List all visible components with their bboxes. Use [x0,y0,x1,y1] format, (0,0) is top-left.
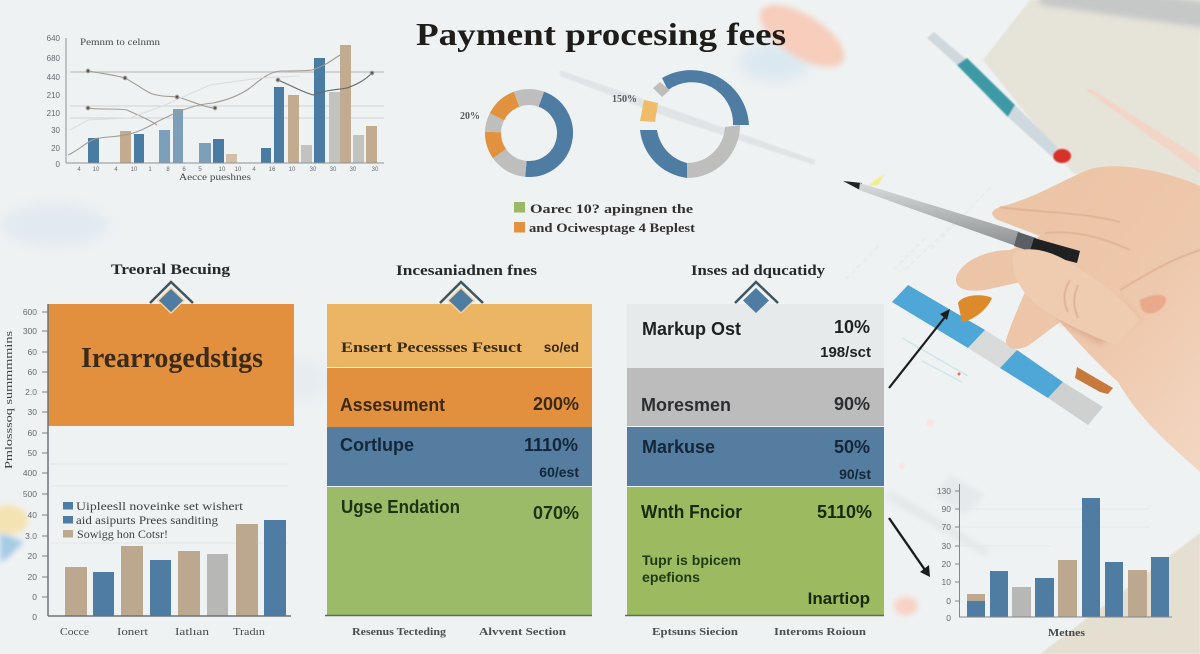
bottom right axis labels: 30 [942,541,951,551]
thumb [1013,249,1140,345]
bottom right bars [967,498,1169,617]
donut label left: 20% [460,111,480,122]
left y axis title: Pmlosssoq summmmins [4,331,15,469]
chart axis labels: 4 [252,167,256,173]
left axis ticks and labels: 30 [28,407,37,417]
title: Payment procesing fees [416,16,786,52]
chart caption: Pemnm to celnmn [80,38,160,48]
middle column heading: Incesaniadnen fnes [396,263,537,279]
left axis ticks and labels: 50 [28,448,37,458]
chart axis labels: 10 [131,167,138,173]
chart axis labels: 640 [47,34,61,43]
left bars [65,520,286,616]
chart axis labels: 30 [330,167,337,173]
right block labels: Moresmen [641,395,731,415]
right block labels: epefions [642,570,700,585]
right block labels: 5110% [817,502,872,522]
middle block labels: Cortlupe [340,435,414,455]
left axis ticks and labels: 300 [23,326,37,336]
arrow to bar chart [889,518,930,577]
bottom right axis labels: 0 [946,596,951,606]
right block labels: 10% [834,317,870,337]
bottom right axis labels: 20 [942,559,951,569]
left x axis labels: Ionert [117,627,148,638]
right block labels: Markup Ost [642,319,741,339]
left legend: Sowigg hon Cotsr! [77,529,168,541]
right footer labels: Eptsuns Siecion [652,626,738,638]
middle block labels: 200% [533,394,579,414]
donut legend: and Ociwesptage 4 Beplest [529,220,696,235]
right stacked blocks [627,304,884,615]
middle chevron [440,282,483,303]
chart axis labels: 8 [166,167,170,173]
bottom right axis labels: 10 [942,577,951,587]
left axis ticks and labels: 60 [28,428,37,438]
right chevron [735,282,778,303]
left axis ticks and labels: 600 [23,307,37,317]
right block labels: Tupr is bpicem [642,553,741,568]
panel: middle column [325,263,592,638]
donut chart right [640,70,749,178]
left orange block text: Irearrogedstigs [81,343,263,374]
donut chart left [493,97,565,169]
chart axis labels: 6 [182,167,186,173]
middle block labels: 070% [533,503,579,523]
bottom right axis labels: 90 [942,504,951,514]
top left combo chart [47,34,384,183]
bottom right axis labels [937,486,951,623]
chart axis labels: 30 [51,126,61,135]
left axis ticks and labels: 500 [23,489,37,499]
left legend [63,501,244,541]
chart bars [88,45,377,163]
left legend: aid asipurts Prees sanditing [76,515,218,527]
right block labels: 90% [834,394,870,414]
middle block labels: Ugse Endation [341,497,460,517]
left axis ticks and labels: 20 [28,572,37,582]
middle block labels: 1110% [524,435,578,455]
donut label right: 150% [612,94,637,105]
chart axis labels: 1 [148,167,152,173]
right block labels: Inartiop [808,589,870,608]
donut legend: Oarec 10? apingnen the [530,201,693,216]
chart axis labels: 30 [310,167,317,173]
middle footer labels: Alvvent Section [479,626,566,638]
left axis ticks and labels: 2.0 [25,387,37,397]
pen in hand [843,181,1080,263]
middle footer labels [352,626,566,638]
right diamond [743,288,769,313]
chart axis labels: 10 [219,167,226,173]
right block labels: 90/st [839,466,871,482]
right block labels: Markuse [642,437,715,457]
left chevron [150,282,193,303]
chart axis labels: 10 [235,167,242,173]
chart axis labels: 20 [51,144,61,153]
left x axis labels [60,627,266,638]
left axis ticks and labels: 400 [23,468,37,478]
chart axis labels: 16 [269,167,276,173]
right footer labels [652,626,866,638]
bottom right axis labels: 70 [942,522,951,532]
bottom right axis title: Metnes [1048,628,1085,639]
middle diamond [448,288,474,313]
left axis ticks and labels: 60 [28,347,37,357]
left diamond [158,288,184,313]
chart trend lines [68,55,374,155]
left axis ticks and labels: 20 [28,551,37,561]
left x axis labels: Tradın [233,627,266,638]
chart axis labels: 5 [198,167,202,173]
chart axis labels [47,34,379,173]
bottom right bar chart [937,484,1172,639]
left axis ticks and labels: 0 [32,612,37,622]
panel: left column [4,262,294,638]
chart axis labels: 440 [47,73,61,82]
middle block labels: Assesument [340,395,445,415]
left axis ticks and labels [23,307,48,622]
middle block labels: 60/est [539,464,579,480]
right column heading: Inses ad dqucatidy [691,263,826,279]
bottom right axis labels: 130 [937,486,951,496]
middle stacked blocks [327,304,592,615]
right block labels [641,317,872,608]
right block labels: 50% [834,437,870,457]
hand holding pen [843,166,1200,472]
chart axis labels: 10 [93,167,100,173]
teal pen, blurred [927,32,1071,163]
left x axis labels: Iatlıan [175,627,210,638]
left legend: Uipleesll noveinke set wishert [76,501,244,513]
left axis ticks and labels: 40 [28,510,37,520]
chart axis labels: 10 [289,167,296,173]
left axis ticks and labels: 60 [28,367,37,377]
middle block labels: Ensert Pecessses Fesuct [341,340,522,356]
chart axis labels: 30 [372,167,379,173]
left orange block [48,304,294,426]
chart axis labels: 210 [47,91,61,100]
left x axis labels: Cocce [60,627,89,638]
middle block labels: so/ed [544,340,579,355]
arrow to hand chart [889,309,950,388]
bottom right axis labels: 0 [946,613,951,623]
pink pencil, blurred [1086,89,1200,173]
right block labels: Wnth Fncior [641,502,742,522]
chart axis labels: 30 [350,167,357,173]
chart axis labels: 680 [47,54,61,63]
right footer labels: Interoms Roioun [774,626,866,638]
chart axis labels: 4 [114,167,118,173]
left axis ticks and labels: 3.0 [25,531,37,541]
chart axis labels: 210 [47,109,61,118]
middle footer labels: Resenus Tecteding [352,626,447,638]
left axis ticks and labels: 0 [32,592,37,602]
left column heading: Treoral Becuing [111,262,231,278]
right block labels: 198/sct [820,344,871,361]
middle block labels [340,340,579,523]
panel: right column [625,263,884,638]
chart axis labels: 0 [56,160,61,169]
chart axis labels: 4 [77,167,81,173]
chart printed on paper under the hand [845,188,1113,469]
donut legend [514,201,696,235]
chart x axis title: Aecce pueshnes [179,173,251,183]
